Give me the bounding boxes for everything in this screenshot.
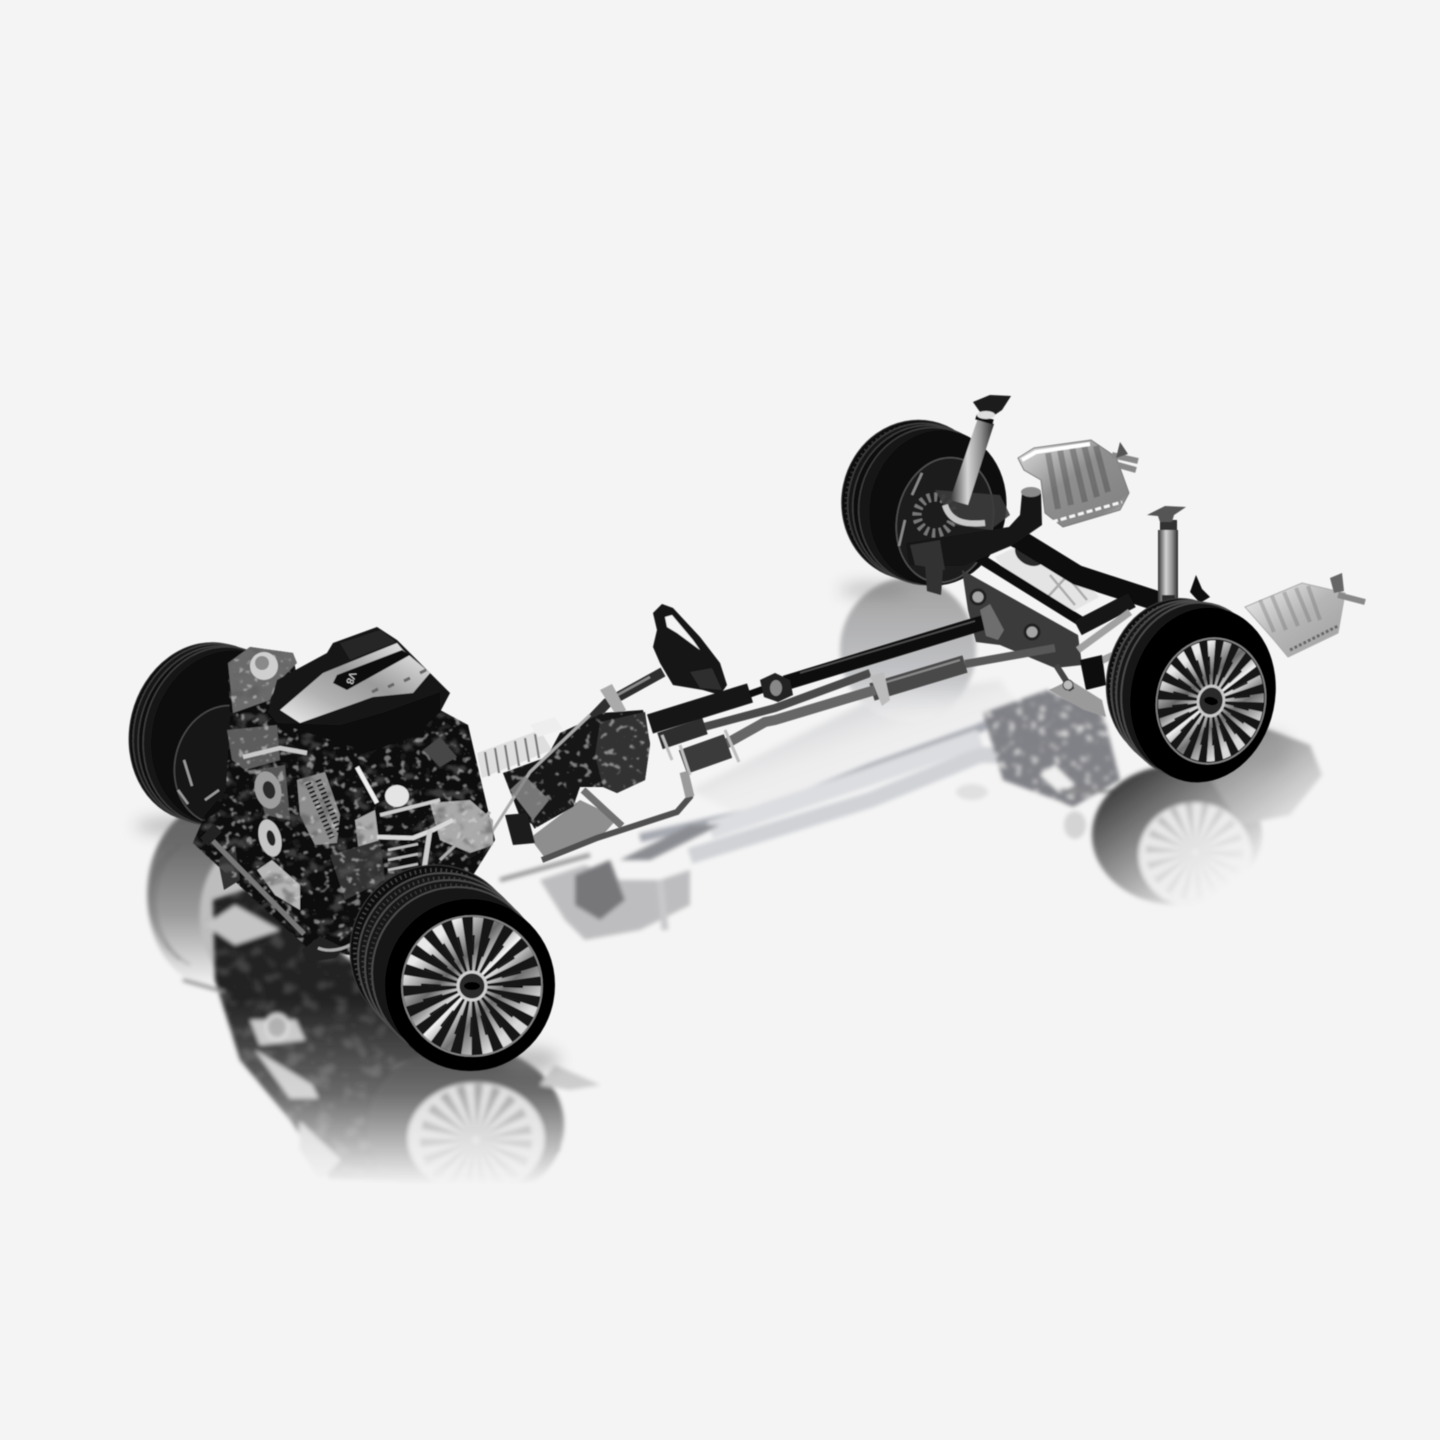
cam chain cover teeth (308, 780, 340, 838)
reflection: near rear wheel (1092, 727, 1322, 907)
lower arms and plate (1049, 680, 1106, 717)
cover V8 badge: V8 (343, 670, 358, 686)
rear subframe (906, 487, 1160, 717)
reflection: near front wheel (384, 1055, 598, 1180)
reflection: far front wheel (147, 803, 300, 987)
exhaust pipes (530, 648, 1055, 860)
grey floor tray (530, 800, 618, 858)
knuckle at far wheel (935, 490, 1010, 530)
reflection: far rear wheel (838, 578, 978, 702)
crossbar (906, 493, 1042, 566)
wheel: far front (110, 626, 323, 842)
transfer case (595, 712, 650, 793)
pipes and rods (243, 748, 307, 757)
reservoir cap (250, 652, 278, 680)
engine grit (190, 640, 500, 960)
reflection: light sheen under shaft (690, 680, 1030, 815)
engine cover (268, 627, 450, 752)
steering wheel and column (565, 604, 727, 747)
wheel: near front (350, 865, 555, 1071)
reflection: pipes (620, 705, 1030, 860)
reflection: engine block (180, 888, 560, 1180)
metallic parts (228, 647, 297, 713)
reflection: transmission (500, 855, 690, 940)
side plate (962, 570, 1082, 668)
shock absorber: near rear (1147, 506, 1210, 621)
cover silver insert (280, 643, 430, 723)
wheel: near rear (1091, 586, 1292, 796)
contact shadows (135, 584, 1289, 1072)
propeller shaft (650, 604, 1004, 724)
floor reflection: front axle and engine (180, 888, 598, 1180)
wheel: far rear (827, 406, 1021, 598)
far rear hub details (899, 473, 953, 560)
muffler: far side (1018, 440, 1138, 527)
muffler: near side (1245, 573, 1365, 657)
black box (423, 737, 457, 767)
near rear rim (1145, 628, 1277, 774)
subframe back rail (1012, 535, 1160, 602)
near front rim (402, 916, 542, 1056)
disc (251, 768, 285, 812)
steering wheel rim (653, 604, 727, 695)
strut cap (385, 785, 409, 807)
subframe front rail (976, 556, 1082, 622)
differential (995, 547, 1099, 613)
pulley (254, 817, 286, 859)
bumper beam (212, 840, 304, 934)
engine assembly (190, 640, 500, 962)
transmission (477, 709, 651, 846)
engine block (193, 647, 495, 955)
floor reflection: centre exhaust and frame (500, 680, 1030, 940)
coil spring (388, 844, 418, 870)
reflection: rear subframe (956, 680, 1130, 839)
cover V8 strip (333, 650, 410, 690)
shock absorber: far rear (950, 395, 1011, 505)
